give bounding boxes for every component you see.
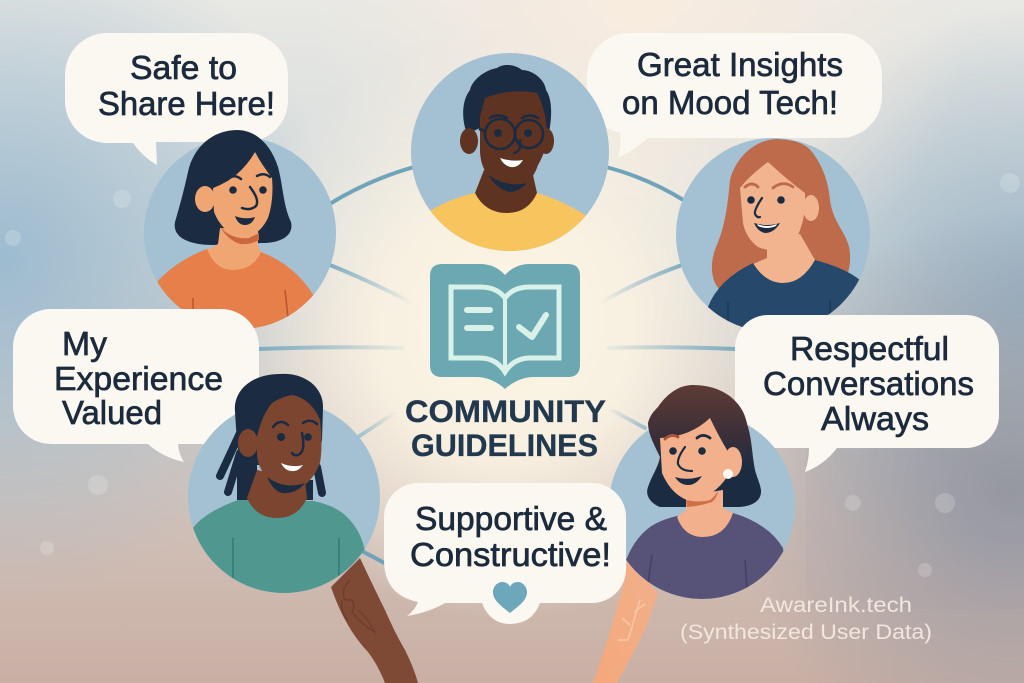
watermark: awareink.tech synthesized user data bbox=[680, 594, 932, 644]
title: community guidelines: GUIDELINES bbox=[411, 427, 598, 463]
arm with light tattoo bbox=[593, 560, 658, 683]
avatar: person with dreadlocks in teal shirt bbox=[180, 374, 380, 600]
central book icon bbox=[430, 264, 580, 389]
avatar: woman in orange shirt bbox=[144, 130, 336, 340]
speech bubble: supportive and constructive: Constructive! bbox=[410, 536, 611, 573]
speech bubble: safe to share here: Safe to bbox=[130, 49, 237, 86]
speech bubble: great insights on mood tech: on Mood Tech! bbox=[622, 84, 838, 121]
title: community guidelines bbox=[405, 393, 606, 463]
speech bubble: respectful conversations always: Always bbox=[821, 400, 929, 437]
avatar: woman with red hair in navy shirt bbox=[676, 138, 870, 340]
arm with tattoo bbox=[331, 558, 418, 683]
speech bubble: respectful conversations always: Conversations bbox=[763, 365, 974, 402]
watermark: awareink.tech synthesized user data: (Synthesized User Data) bbox=[680, 621, 932, 644]
speech bubble: respectful conversations always: Respectful bbox=[790, 330, 949, 367]
speech bubble: great insights on mood tech: Great Insights bbox=[637, 46, 843, 83]
speech bubble: great insights on mood tech bbox=[587, 33, 882, 158]
speech bubble: my experience valued: My bbox=[62, 325, 108, 362]
speech bubble: my experience valued bbox=[13, 309, 259, 462]
speech bubble: my experience valued: Valued bbox=[62, 394, 162, 431]
speech bubble: safe to share here: Share Here! bbox=[98, 85, 275, 122]
avatar: man with glasses in yellow shirt bbox=[411, 53, 609, 260]
speech bubble: my experience valued: Experience bbox=[54, 360, 223, 397]
connector lines bbox=[259, 167, 735, 567]
title: community guidelines: COMMUNITY bbox=[405, 393, 606, 429]
speech bubble: supportive and constructive: Supportive & bbox=[415, 500, 607, 537]
speech bubble: safe to share here bbox=[65, 33, 288, 165]
speech bubble: supportive and constructive bbox=[384, 483, 626, 624]
icon: heart bbox=[493, 582, 527, 613]
avatar: woman with brown hair in purple shirt bbox=[609, 385, 795, 610]
speech bubble: respectful conversations always bbox=[735, 315, 999, 472]
watermark: awareink.tech synthesized user data: AwareInk.tech bbox=[760, 594, 912, 617]
